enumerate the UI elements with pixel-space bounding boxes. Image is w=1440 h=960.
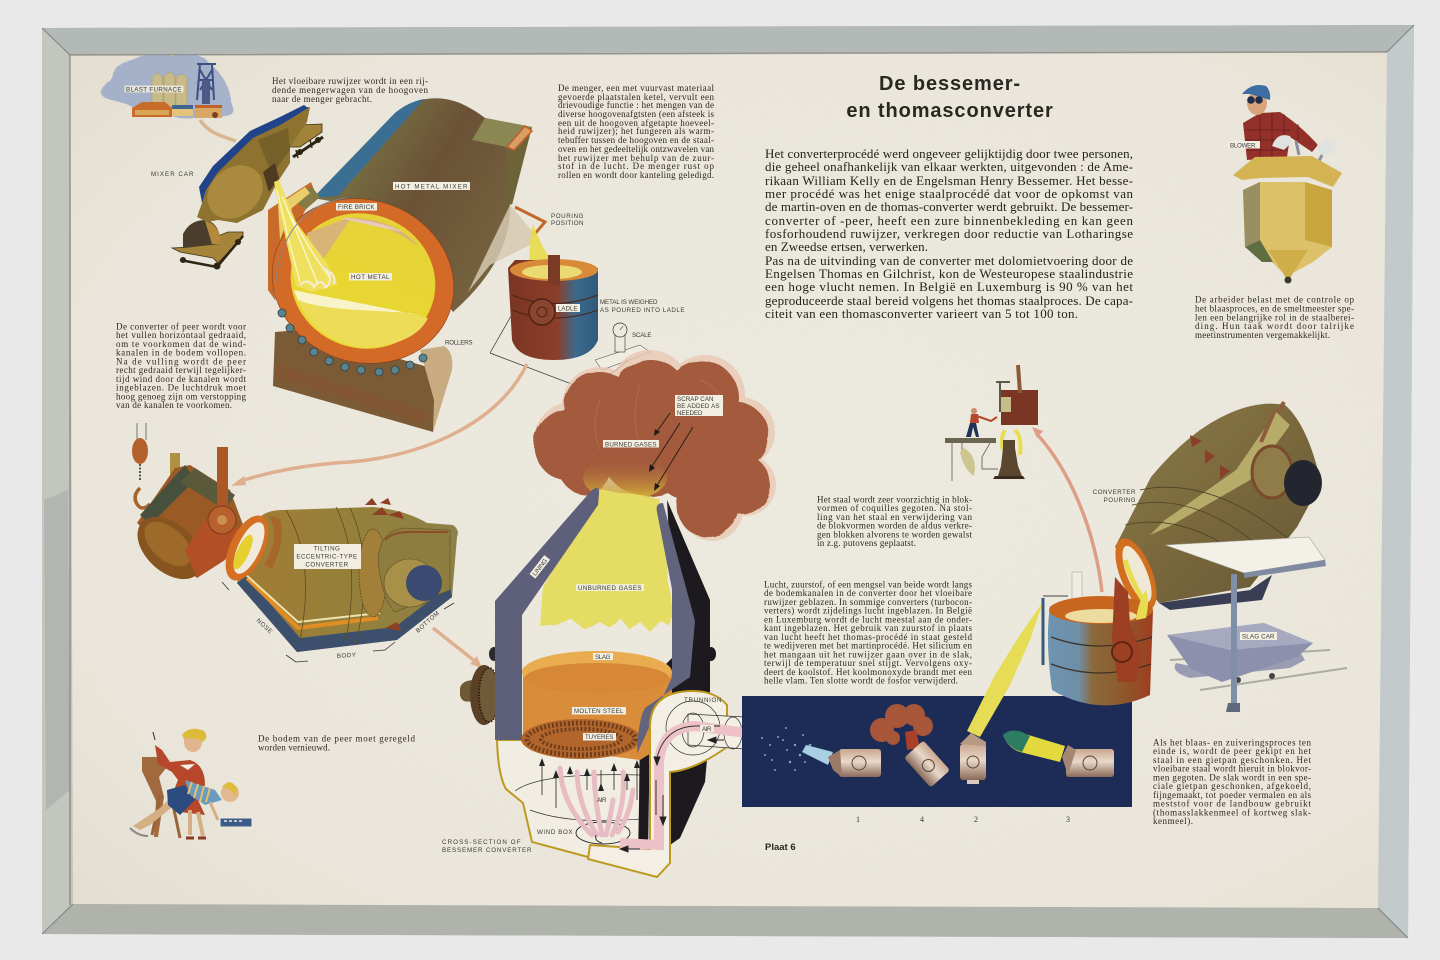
text: the mixer: stof in de lucht. De menger rust op	[558, 161, 714, 171]
label: mixer car: MIXER CAR	[151, 171, 194, 178]
text: filling the converter: ingeblazen. De luchtdruk moet	[116, 383, 246, 393]
labels: HOT METAL MIXER	[395, 184, 468, 190]
labels: nose body bottom: BOTTOM	[415, 610, 441, 634]
text: filling the converter: tijd wind door de kanalen wordt	[116, 374, 246, 384]
label: blast furnace: BLAST FURNACE	[126, 86, 182, 93]
left lining	[495, 488, 599, 740]
text: blowing process: te wedijveren met het martinprocédé. Het silicium en	[764, 641, 972, 651]
label: slag: SLAG	[595, 654, 611, 661]
text: filling the converter: om te voorkomen dat de wind-	[116, 339, 246, 349]
icon: tilting eccentric-type converter	[217, 498, 458, 662]
label: converter pouring: POURING	[1104, 497, 1136, 504]
text: casting: in z.g. putovens geplaatst.	[817, 538, 916, 548]
label: scrap can: SCRAP CAN	[677, 396, 714, 403]
label: lining: LINING	[531, 557, 549, 577]
label: scrap can	[675, 395, 723, 417]
text: blowing process: het mangaan uit het ruwijzer gaan over in de slak,	[764, 649, 972, 659]
title	[846, 73, 1054, 122]
text: blowing process	[764, 580, 972, 686]
cylinder body	[313, 98, 532, 312]
right lining	[637, 503, 695, 754]
text: filling the converter: van de kanalen te voorkomen.	[116, 400, 232, 410]
text: bottom renewal	[258, 734, 416, 752]
phase 2: yellow jet and vessel	[960, 733, 986, 784]
text: blowing process: helle vlam. Ten slotte wordt de fosfor verwijderd.	[764, 676, 958, 686]
label: hot metal: HOT METAL	[351, 274, 390, 281]
icon: hot metal mixer	[249, 98, 545, 432]
text: blowing process: de bodemkanalen in de converter door het vloeibare	[764, 588, 972, 598]
arrow: converter to cross-section	[433, 628, 482, 668]
numbers: phase order	[856, 815, 1070, 824]
numbers: phase order: 1	[856, 815, 860, 824]
text: blowing process: deert de koolstof. Het koolmonoxyde brandt met een	[764, 667, 972, 677]
label: tilting converter: ECCENTRIC-TYPE	[296, 554, 358, 560]
label: slag car: SLAG CAR	[1242, 633, 1275, 640]
icon: ladle tilting with hook	[126, 423, 246, 591]
title: De bessemer-	[879, 73, 1021, 95]
main text block: Pas na de uitvinding van de converter met dolomietvoering door de	[765, 253, 1133, 268]
wind box lines and air streams	[515, 760, 640, 844]
icon: yellow flame jet	[967, 602, 1043, 737]
text: hot metal transport: dende mengerwagen van de hoogoven	[272, 85, 428, 95]
text: end of process: fijngemaakt, tot poeder vermalen en als	[1153, 790, 1311, 800]
text: filling the converter: het vullen horizontaal gedraaid,	[116, 330, 246, 340]
labels: UNBURNED GASES	[578, 585, 642, 592]
numbers: phase order: 2	[974, 815, 978, 824]
label: tilting converter: CONVERTER	[305, 562, 349, 568]
arrow: furnace to mixer car	[200, 120, 236, 141]
scale	[595, 323, 650, 370]
text: the mixer: oven en het gedeeltelijk ontzwavelen van	[558, 144, 714, 154]
caption: plate number: Plaat 6	[765, 842, 796, 853]
text: casting: gen blokken alvorens te worden gewalst	[817, 529, 972, 539]
phase 3: green flame	[1003, 731, 1114, 777]
main text block: mer procédé was het enige staalprocédé dat voor de opkomst van	[765, 186, 1134, 201]
text: filling the converter: Na de vulling wordt de peer	[116, 356, 246, 366]
spout orange	[268, 182, 315, 300]
main text block: converter of -peer, heeft een zure binnenbekleding en kan geen	[765, 213, 1134, 228]
fire brick ring	[249, 173, 477, 389]
label: cross-section caption: BESSEMER CONVERTER	[442, 847, 532, 854]
text: end of process: einde is, wordt de peer gekipt en het	[1153, 746, 1311, 756]
text: blowing process: kant ingeblazen. Het gebruik van zuurstof in plaats	[764, 623, 972, 633]
label: cross-section caption	[442, 839, 532, 854]
main text block: Engelsen Thomas en Gilchrist, kon de Westeuropese staalindustrie	[765, 266, 1133, 281]
trunnion tube	[688, 714, 761, 749]
main text block: die geheel onafhankelijk van elkaar werkten, uitgevonden : de Ame-	[765, 159, 1133, 174]
text: casting: vormen of coquilles gegoten. Na stol-	[817, 503, 972, 513]
text: end of process: kenmeel).	[1153, 816, 1193, 826]
icon: converter pouring	[1093, 402, 1326, 615]
icon: blower at pulpit	[1228, 85, 1342, 284]
label: ladle: LADLE	[558, 305, 578, 312]
text: casting: ling van het staal en verwijdering van	[817, 512, 972, 522]
text: filling the converter: hoog genoeg zijn om verstopping	[116, 391, 246, 401]
text: blowing process: en Luxemburg wordt de lucht meestal aan de onder-	[764, 614, 972, 624]
text: the blower worker: De arbeider belast met de controle op	[1195, 294, 1354, 304]
label: scrap can: BE ADDED AS	[677, 403, 720, 410]
title: en thomasconverter	[846, 100, 1054, 122]
label: blower	[1228, 141, 1260, 149]
label: wind box: WIND BOX	[537, 829, 573, 836]
phase 1: sparks	[761, 727, 881, 777]
icon: burned gas cloud	[534, 350, 776, 541]
labels: nose body bottom: BODY	[337, 652, 357, 660]
lower truck	[172, 220, 243, 270]
text: end of process: men gegoten. De slak wordt in een spe-	[1153, 772, 1311, 782]
text: the mixer: De menger, een met vuurvast materiaal	[558, 83, 714, 93]
text: hot metal transport: Het vloeibare ruwijzer wordt in een rij-	[272, 76, 428, 86]
label: tilting converter: TILTING	[314, 546, 340, 552]
text: end of process: Als het blaas- en zuiveringsproces ten	[1153, 738, 1312, 748]
text: hot metal transport	[272, 76, 428, 104]
text: the blower worker	[1195, 294, 1354, 340]
label: pouring position: POURING	[551, 213, 584, 220]
text: hot metal transport: naar de menger gebracht.	[272, 94, 372, 104]
label: blower: BLOWER	[1230, 142, 1256, 149]
table	[1165, 537, 1325, 573]
icon: mother and child	[130, 729, 252, 838]
icon: converter cross-section	[460, 488, 761, 877]
text: bottom renewal: De bodem van de peer moet geregeld	[258, 734, 416, 744]
text: the blower worker: het blaasproces, en de smeltmeester spe-	[1195, 303, 1354, 313]
text: the mixer: rollen en wordt door kanteling geledigd.	[558, 170, 714, 180]
outer shell	[497, 740, 640, 857]
arrow: ladle to ingot moulds	[1032, 427, 1102, 592]
panel: converter blowing phases	[742, 696, 1132, 807]
text: the mixer: gevoerde plaatstalen ketel, vervult een	[558, 92, 714, 102]
label: metal weighed: METAL IS WEIGHED	[600, 299, 658, 306]
text: the mixer: drievoudige functie : het mengen van de	[558, 100, 714, 110]
text: the mixer: het ruwijzer met behulp van de zuur-	[558, 153, 714, 163]
text: end of process: ciale gietpan geschonken, afgekoeld,	[1153, 781, 1311, 791]
air duct	[620, 726, 746, 845]
label: pouring position	[551, 213, 584, 227]
steel bath	[523, 656, 672, 760]
text: end of process: staal in een gietpan geschonken. Het	[1153, 755, 1311, 765]
main text block: geproduceerde staal bereid volgens het thomas staalproces. De capa-	[765, 293, 1133, 308]
text: blowing process: Lucht, zuurstof, of een mengsel van beide wordt langs	[764, 580, 972, 590]
label: molten steel: MOLTEN STEEL	[574, 708, 624, 715]
label: scrap can: NEEDED	[677, 410, 703, 417]
gases	[540, 489, 672, 632]
rollers	[278, 309, 427, 376]
text: casting	[817, 494, 972, 548]
labels: nose body bottom: NOSE	[255, 617, 274, 636]
icon: slag car	[1167, 574, 1347, 712]
label: rollers: ROLLERS	[445, 340, 473, 346]
main text block: Het converterprocédé werd ongeveer gelijktijdig door twee personen,	[765, 146, 1133, 161]
labels: nose body bottom	[222, 582, 454, 662]
barrel	[197, 107, 310, 223]
label: tuyeres: TUYERES	[585, 734, 614, 741]
text: blowing process: terwijl de temperatuur snel stijgt. Vervolgens oxy-	[764, 658, 972, 668]
label: tilting converter	[294, 544, 361, 569]
gear trunnion	[460, 665, 499, 725]
main text block: een hoge vlucht nemen. In België en Luxemburg is 90 % van het	[765, 279, 1133, 294]
text: blowing process: van lucht heeft het thomas-procédé in staat gesteld	[764, 632, 972, 642]
text: end of process: (thomasslakkenmeel of kortweg slak-	[1153, 807, 1311, 817]
text: filling the converter: recht gedraaid terwijl tegelijker-	[116, 365, 246, 375]
main text block: en Zweedse ertsen, verwerken.	[765, 239, 928, 254]
label: pouring position: POSITION	[551, 220, 584, 227]
main text block	[765, 146, 1134, 321]
label: air in tube: AIR	[702, 726, 712, 733]
label: metal weighed	[600, 299, 685, 314]
label: converter pouring: CONVERTER	[1093, 489, 1136, 496]
air duct shell	[588, 691, 727, 877]
text: filling the converter: De converter of peer wordt voor	[116, 322, 246, 332]
text: casting: de blokvormen worden de aldus verkre-	[817, 521, 972, 531]
text: end of process	[1153, 738, 1312, 826]
molten metal	[271, 193, 455, 369]
main text block: citeit van een thomasconverter varieert van 5 tot 100 ton.	[765, 306, 1078, 321]
text: filling the converter	[116, 322, 246, 410]
icon: blast furnace	[100, 55, 233, 118]
icon: mixer car	[151, 105, 323, 270]
label: converter pouring	[1093, 489, 1136, 504]
text: end of process: meststof voor de landbouw gebruikt	[1153, 799, 1311, 809]
text: the blower worker: len een belangrijke rol in de staalberei-	[1195, 312, 1354, 322]
text: the blower worker: meetinstrumenten vergemakkelijkt.	[1195, 330, 1330, 340]
pour stream	[274, 180, 338, 292]
label: fire brick: FIRE BRICK	[338, 204, 375, 211]
text: the mixer: heid ruwijzer); het fungeren als warm-	[558, 126, 714, 136]
numbers: phase order: 3	[1066, 815, 1070, 824]
numbers: phase order: 4	[920, 815, 924, 824]
icon: ingot casting scene	[945, 365, 1038, 481]
icon: ladle on scale	[490, 213, 685, 391]
base	[273, 330, 452, 432]
arrow: ladle to tilting ladle	[231, 364, 527, 486]
text: bottom renewal: worden vernieuwd.	[258, 742, 330, 752]
text: casting: Het staal wordt zeer voorzichtig in blok-	[817, 494, 972, 504]
label: scale: SCALE	[632, 332, 652, 339]
label: air in tube	[700, 725, 714, 733]
label: metal weighed: AS POURED INTO LADLE	[600, 307, 685, 314]
label: cross-section caption: CROSS-SECTION OF	[442, 839, 521, 846]
text: blowing process: verters) wordt zijdelings lucht ingeblazen. In België	[764, 606, 972, 616]
main text block: rikaan William Kelly en de Engelsman Henry Bessemer. Het besse-	[765, 173, 1133, 188]
text: filling the converter: kanalen in de bodem vollopen.	[116, 348, 246, 358]
text: the mixer: een uit de hoogoven afgetapte hoeveel-	[558, 118, 714, 128]
text: the mixer	[558, 83, 714, 180]
text: the mixer: tebuffer tussen de hoogoven en de staal-	[558, 135, 714, 145]
rim line	[275, 198, 345, 300]
phase 4: burning cloud	[870, 704, 950, 788]
main text block: de martin-oven en de thomas-converter werdt gebruikt. De bessemer-	[765, 199, 1133, 214]
label: burned gases: BURNED GASES	[605, 441, 657, 448]
icon: receiving ladle	[1043, 572, 1153, 705]
main text block: fosforhoudend ruwijzer, verkregen door reductie van Lotharingse	[765, 226, 1133, 241]
text: the mixer: diverse hoogovenafgtsten (een afsteek is	[558, 109, 714, 119]
upper truck	[290, 124, 323, 158]
text: end of process: vloeibare staal wordt hieruit in blokvor-	[1153, 764, 1311, 774]
label: air: AIR	[597, 797, 607, 804]
black shell	[640, 500, 710, 845]
text: blowing process: ruwijzer geblazen. In sommige converters (turbocon-	[764, 597, 972, 607]
label: trunnion: TRUNNION	[684, 697, 722, 704]
text: the blower worker: ding. Hun taak wordt door talrijke	[1195, 321, 1354, 331]
